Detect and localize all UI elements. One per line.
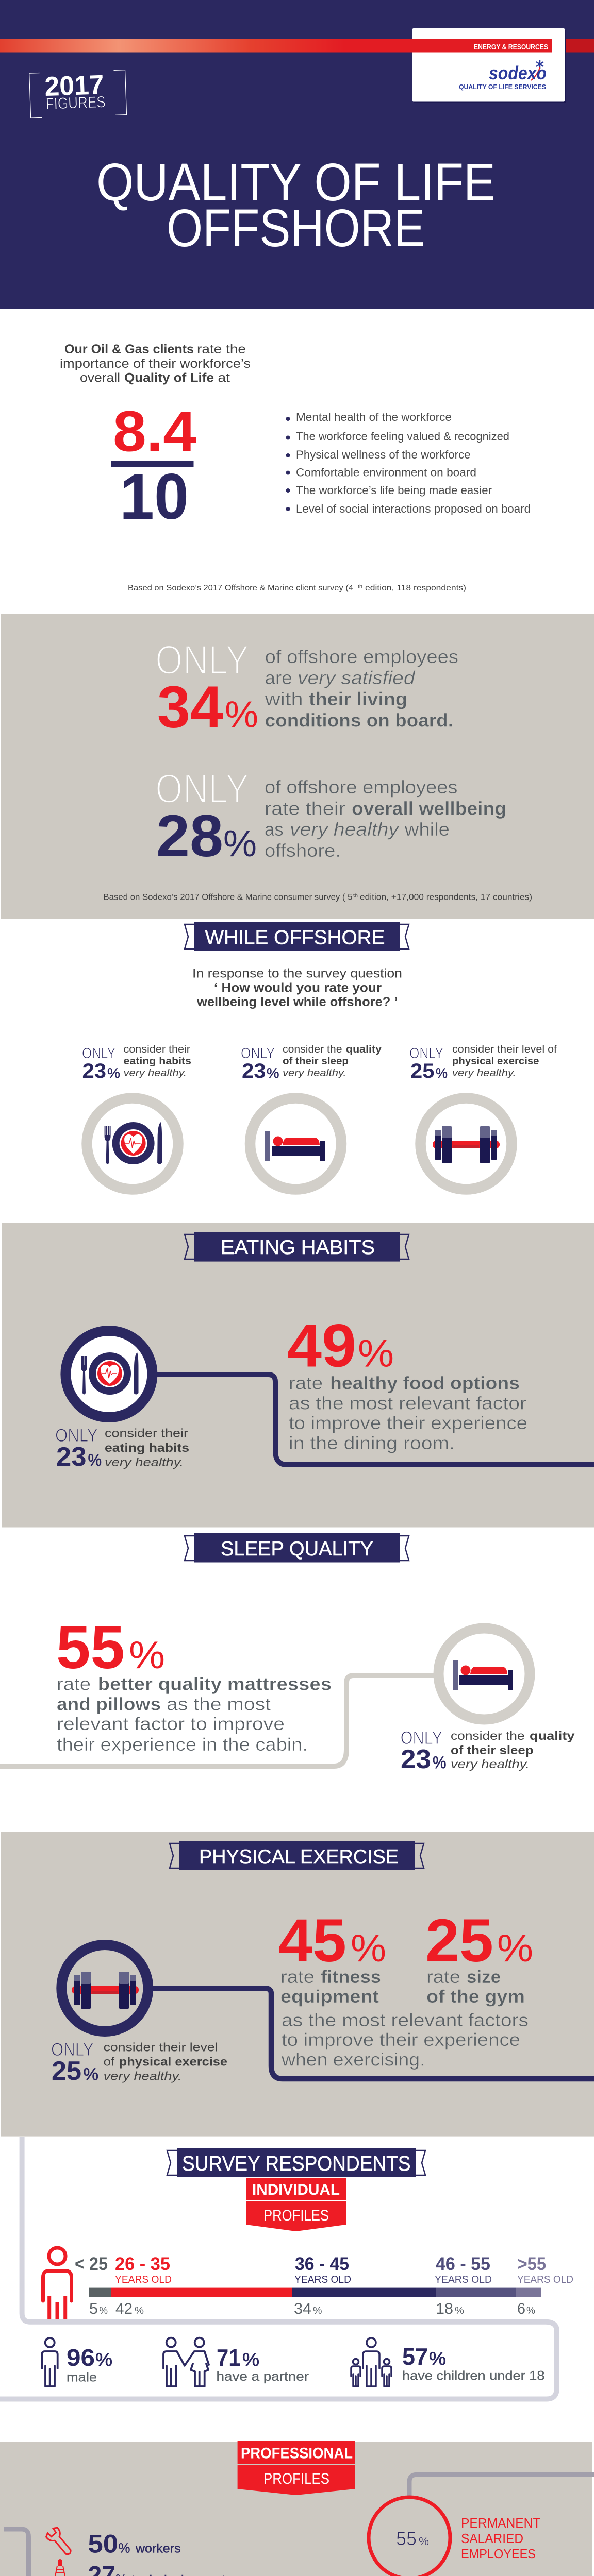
circle: permanent salaried 55 percent: % xyxy=(419,2535,429,2548)
stat: 34 percent satisfied: ONLY xyxy=(155,637,249,683)
icon: plate in navy ring xyxy=(65,1331,152,1417)
stat column: exercise 25 percent: % xyxy=(436,1065,448,1081)
stat: eating habits 23 percent: % xyxy=(88,1451,102,1469)
age percentages: % xyxy=(135,2306,144,2316)
stat: 28 percent healthy: as xyxy=(265,819,284,840)
age group labels: YEARS OLD xyxy=(435,2274,492,2285)
stat: 96 percent male xyxy=(67,2344,112,2384)
stat: 71 percent partner: 71 xyxy=(217,2344,240,2371)
stat: 45 and 25 percent gym: rate xyxy=(426,1967,460,1987)
age percentages: 5 xyxy=(89,2300,98,2317)
tag: professional profiles: PROFILES xyxy=(263,2470,329,2487)
stat: 45 and 25 percent gym xyxy=(278,1907,533,2070)
age percentages: 42 xyxy=(116,2300,133,2317)
stat: 57 percent children: have children under 18 xyxy=(402,2369,544,2383)
stat: 45 and 25 percent gym: % xyxy=(351,1926,386,1970)
stat column: exercise 25 percent: 25 xyxy=(410,1060,434,1082)
footnote: consumer survey xyxy=(103,892,532,902)
stat: 45 and 25 percent gym: size xyxy=(467,1967,501,1987)
bullet list: quality of life factors: Level of social interactions proposed on board xyxy=(296,502,531,515)
title: OFFSHORE xyxy=(167,198,425,258)
tag: individual profiles: INDIVIDUAL xyxy=(252,2181,340,2198)
stat column: sleep 23 percent: ONLY xyxy=(241,1045,275,1062)
stat column: eating habits 23 percent: % xyxy=(107,1065,120,1081)
stat column: exercise 25 percent: physical exercise xyxy=(452,1056,539,1067)
intro text: clients rating: at xyxy=(218,371,230,385)
stat: sleep 23 percent xyxy=(401,1728,575,1774)
stat row: 27 percent technical operators xyxy=(88,2561,243,2576)
footnote: client survey xyxy=(128,584,466,592)
stat column: eating habits 23 percent: eating habits xyxy=(124,1056,191,1067)
stat: 49 percent healthy food: in the dining room. xyxy=(289,1433,455,1453)
stat: 45 and 25 percent gym: equipment xyxy=(280,1987,379,2007)
header red banner xyxy=(0,39,594,53)
stat: eating habits 23 percent xyxy=(55,1426,189,1472)
bullet list: quality of life factors: Mental health of the workforce xyxy=(296,411,452,423)
stat column: sleep 23 percent: very healthy. xyxy=(283,1067,346,1079)
icon: wrench xyxy=(45,2526,75,2558)
icon: red person xyxy=(43,2248,71,2319)
connector line: professional xyxy=(4,2475,594,2576)
stat column: sleep 23 percent: % xyxy=(267,1065,279,1081)
icon: plate in ring xyxy=(87,1098,178,1189)
stat: 55 percent mattresses: 55 xyxy=(56,1614,125,1682)
stat: 34 percent satisfied: with xyxy=(264,688,303,709)
stat: 49 percent healthy food: to improve their experience xyxy=(289,1413,527,1433)
age percentages: 34 xyxy=(294,2300,311,2317)
stat: 55 percent mattresses: rate xyxy=(57,1674,91,1694)
stat column: eating habits 23 percent: 23 xyxy=(82,1060,106,1082)
stat: exercise 25 percent: physical exercise xyxy=(119,2055,227,2068)
stat: 57 percent children: 57 xyxy=(402,2343,428,2370)
connector line: exercise xyxy=(153,1989,594,2079)
survey question text: In response to the survey question xyxy=(192,967,402,981)
age percentages xyxy=(89,2300,535,2317)
ribbon heading: physical exercise: PHYSICAL EXERCISE xyxy=(199,1846,399,1868)
stat: 55 percent mattresses: and pillows xyxy=(57,1694,161,1715)
intro text: clients rating: Our Oil & Gas clients xyxy=(64,342,194,357)
stat: 28 percent healthy: ONLY xyxy=(155,766,249,811)
survey question text: wellbeing level while offshore? ’ xyxy=(196,995,398,1009)
tag: individual profiles xyxy=(246,2178,346,2231)
footnote: client survey: edition, 118 respondents) xyxy=(365,584,466,592)
intro text: clients rating: rate the xyxy=(197,342,246,357)
stat column: sleep 23 percent: of their sleep xyxy=(283,1056,349,1067)
age group labels: 46 - 55 xyxy=(436,2254,490,2274)
stat: eating habits 23 percent: eating habits xyxy=(105,1441,189,1454)
age group labels: YEARS OLD xyxy=(294,2274,351,2285)
stat: exercise 25 percent: 25 xyxy=(52,2056,81,2086)
stat: 49 percent healthy food: 49 xyxy=(287,1312,356,1380)
survey question text: ‘ How would you rate your xyxy=(214,981,382,995)
title: QUALITY OF LIFE xyxy=(96,152,496,212)
stat row: 50 percent workers: 50 xyxy=(88,2530,118,2558)
stat: sleep 23 percent: very healthy. xyxy=(451,1757,530,1771)
age percentages: % xyxy=(526,2306,535,2316)
stat: 34 percent satisfied xyxy=(155,637,458,740)
age group labels: 26 - 35 xyxy=(115,2254,170,2274)
panel: professional profiles xyxy=(0,2442,592,2576)
stat: sleep 23 percent: 23 xyxy=(401,1744,431,1774)
stat column: exercise 25 percent: ONLY xyxy=(409,1045,443,1062)
stat: 45 and 25 percent gym: fitness xyxy=(321,1967,381,1987)
age group labels xyxy=(75,2254,573,2285)
bullet list: quality of life factors: The workforce feeling valued & recognized xyxy=(296,430,509,443)
stat: 34 percent satisfied: 34 xyxy=(157,674,223,740)
stat: 28 percent healthy: rate their xyxy=(265,798,345,819)
stat: 34 percent satisfied: their living xyxy=(309,688,407,709)
stat row: 50 percent workers: workers xyxy=(135,2542,180,2556)
age group labels: YEARS OLD xyxy=(517,2274,573,2285)
stat: 96 percent male: male xyxy=(67,2370,97,2384)
stat: exercise 25 percent: % xyxy=(84,2065,98,2083)
stat: 55 percent mattresses: their experience in the cabin. xyxy=(57,1735,308,1755)
age group labels: < 25 xyxy=(75,2254,108,2274)
panel: satisfaction figures xyxy=(1,614,594,919)
stat: 45 and 25 percent gym: to improve their experience xyxy=(282,2030,520,2050)
stat: exercise 25 percent: very healthy. xyxy=(104,2069,182,2082)
stat column: sleep 23 percent xyxy=(241,1044,382,1082)
intro text: clients rating: importance of their workforce’s xyxy=(60,357,251,371)
stat: 34 percent satisfied: of offshore employees xyxy=(265,646,458,667)
stat: 96 percent male: 96 xyxy=(67,2344,95,2371)
icon: bed in grey ring xyxy=(438,1628,530,1720)
stat: 55 percent mattresses: relevant factor to improve xyxy=(57,1714,285,1734)
stat: 49 percent healthy food: % xyxy=(358,1332,394,1375)
connector line: eating xyxy=(157,1375,594,1465)
ribbon heading: sleep quality xyxy=(185,1533,409,1562)
worker category labels: PERMANENT xyxy=(461,2515,541,2531)
age group labels: >55 xyxy=(518,2254,546,2274)
icon: oil rig xyxy=(50,2560,70,2576)
stat: eating habits 23 percent: consider their xyxy=(105,1427,188,1440)
stat: 34 percent satisfied: conditions on board. xyxy=(265,710,453,731)
stat: 57 percent children xyxy=(402,2343,544,2383)
icon: male person xyxy=(42,2338,58,2386)
stat: sleep 23 percent: ONLY xyxy=(401,1728,442,1748)
footnote: consumer survey: Based on Sodexo’s 2017 Offshore & Marine consumer survey ( 5 xyxy=(103,892,353,902)
tag: professional profiles: PROFESSIONAL xyxy=(241,2445,353,2462)
stat column: exercise 25 percent: consider their level of xyxy=(452,1044,557,1055)
panel: eating habits xyxy=(2,1223,594,1527)
stat: 49 percent healthy food: rate xyxy=(289,1374,323,1394)
stat: exercise 25 percent: ONLY xyxy=(51,2040,94,2060)
stat: sleep 23 percent: consider the xyxy=(451,1729,525,1742)
ribbon heading: sleep quality: SLEEP QUALITY xyxy=(221,1538,373,1560)
energy and resources label: ENERGY & RESOURCES xyxy=(474,43,548,52)
survey question text xyxy=(192,967,402,1009)
icon: family xyxy=(351,2338,391,2386)
stat column: sleep 23 percent: consider the xyxy=(283,1044,342,1055)
stat: eating habits 23 percent: very healthy. xyxy=(105,1455,184,1469)
bullet list: quality of life factors: Physical wellness of the workforce xyxy=(296,448,470,461)
stat: exercise 25 percent xyxy=(51,2040,227,2086)
stat: 28 percent healthy: of offshore employees xyxy=(265,776,458,798)
ribbon heading: physical exercise xyxy=(170,1841,424,1870)
footnote: client survey: th xyxy=(358,584,362,589)
badge: 2017 figures: 2017 xyxy=(44,70,105,102)
stat column: eating habits 23 percent: very healthy. xyxy=(124,1067,187,1079)
logo card: sodexo xyxy=(489,62,547,83)
stat: eating habits 23 percent: 23 xyxy=(56,1442,87,1472)
logo card xyxy=(412,28,566,103)
stat: 45 and 25 percent gym: rate xyxy=(280,1967,315,1987)
stat: 55 percent mattresses: better quality mattresses xyxy=(98,1674,332,1694)
stat: 28 percent healthy: while xyxy=(404,819,450,840)
stat: 45 and 25 percent gym: of the gym xyxy=(426,1987,525,2007)
ribbon heading: while offshore: WHILE OFFSHORE xyxy=(205,926,385,949)
stat: 34 percent satisfied: are xyxy=(265,667,292,688)
stat: sleep 23 percent: % xyxy=(433,1753,447,1772)
stat: 55 percent mattresses: % xyxy=(129,1633,165,1676)
stat: 71 percent partner xyxy=(217,2344,309,2384)
stat: 49 percent healthy food xyxy=(287,1312,527,1453)
icon: bed in ring xyxy=(250,1098,341,1189)
stat: 57 percent children: % xyxy=(429,2349,446,2369)
tag: professional profiles xyxy=(238,2441,355,2495)
score: 8.4 out of 10: 10 xyxy=(120,461,189,533)
stat column: eating habits 23 percent xyxy=(82,1044,191,1082)
stat column: eating habits 23 percent: consider their xyxy=(124,1044,190,1055)
stat column: sleep 23 percent: 23 xyxy=(242,1060,266,1082)
stat column: eating habits 23 percent: ONLY xyxy=(82,1045,116,1062)
connector line: respondents xyxy=(0,2137,557,2399)
worker category labels: EMPLOYEES xyxy=(461,2546,536,2562)
stat column: exercise 25 percent xyxy=(409,1044,557,1082)
stat: 28 percent healthy: offshore. xyxy=(265,840,341,861)
tag: individual profiles: PROFILES xyxy=(263,2207,329,2224)
footnote: consumer survey: th xyxy=(353,893,358,898)
footnote: consumer survey: edition, +17,000 respondents, 17 countries) xyxy=(360,892,532,902)
worker category labels xyxy=(461,2515,556,2576)
stat: 45 and 25 percent gym: 45 xyxy=(278,1907,346,1975)
age percentages: 6 xyxy=(517,2300,525,2317)
stat: 34 percent satisfied: very satisfied xyxy=(298,667,416,688)
ribbon heading: while offshore xyxy=(185,922,409,951)
intro text: clients rating xyxy=(60,342,251,385)
title xyxy=(96,152,496,258)
score: 8.4 out of 10 xyxy=(111,400,196,533)
stat: 55 percent mattresses: as the most xyxy=(167,1694,271,1715)
icon: couple xyxy=(163,2338,209,2386)
stat: 28 percent healthy: 28 xyxy=(156,803,223,869)
bullet list: quality of life factors xyxy=(286,411,531,515)
stat: sleep 23 percent: quality xyxy=(530,1729,575,1742)
stat: eating habits 23 percent: ONLY xyxy=(55,1426,98,1446)
stat: sleep 23 percent: of their sleep xyxy=(451,1743,533,1757)
stat: 45 and 25 percent gym: when exercising. xyxy=(281,2049,425,2070)
worker category labels: SALARIED xyxy=(461,2531,523,2546)
circle: permanent salaried 55 percent xyxy=(369,2497,450,2576)
bullet list: quality of life factors: Comfortable environment on board xyxy=(296,466,476,479)
stat: 96 percent male: % xyxy=(95,2350,112,2370)
stat: 45 and 25 percent gym: 25 xyxy=(425,1907,493,1975)
stat: 49 percent healthy food: healthy food options xyxy=(330,1374,520,1394)
icon: dumbbell in ring xyxy=(421,1098,512,1189)
stat: 55 percent mattresses xyxy=(56,1614,332,1755)
stat: exercise 25 percent: consider their level xyxy=(104,2040,218,2054)
stat: 45 and 25 percent gym: as the most relevant factors xyxy=(282,2010,529,2030)
stat: 28 percent healthy: very healthy xyxy=(290,819,400,840)
age percentages: % xyxy=(313,2306,322,2316)
panel: physical exercise xyxy=(1,1832,594,2137)
stat: 71 percent partner: have a partner xyxy=(217,2369,309,2384)
age percentages: % xyxy=(99,2306,108,2316)
stat: 71 percent partner: % xyxy=(242,2350,259,2370)
stat: 28 percent healthy: overall wellbeing xyxy=(352,798,506,819)
intro text: clients rating: overall xyxy=(80,371,120,385)
badge: 2017 figures xyxy=(29,69,127,118)
stat column: sleep 23 percent: quality xyxy=(346,1044,382,1055)
age percentages: % xyxy=(455,2306,464,2316)
logo card: QUALITY OF LIFE SERVICES xyxy=(459,83,546,91)
intro text: clients rating: Quality of Life xyxy=(124,371,214,385)
ribbon heading: eating habits xyxy=(185,1232,409,1262)
stat column: exercise 25 percent: very healthy. xyxy=(452,1067,516,1079)
ribbon heading: eating habits: EATING HABITS xyxy=(221,1236,375,1259)
stat: 34 percent satisfied: % xyxy=(225,694,258,736)
badge: 2017 figures: FIGURES xyxy=(45,93,106,113)
stat: exercise 25 percent: of xyxy=(104,2055,115,2068)
bar chart: age distribution xyxy=(89,2288,541,2297)
stat: 49 percent healthy food: as the most relevant factor xyxy=(289,1394,526,1414)
circle: permanent salaried 55 percent: 55 xyxy=(396,2528,417,2549)
panel: navy header background xyxy=(0,0,594,309)
score: 8.4 out of 10: 8.4 xyxy=(113,400,196,464)
stat: 28 percent healthy xyxy=(155,766,506,869)
ribbon heading: survey respondents: SURVEY RESPONDENTS xyxy=(182,2151,410,2175)
footnote: client survey: Based on Sodexo’s 2017 Offshore & Marine client survey (4 xyxy=(128,584,353,592)
stat row: 50 percent workers: % xyxy=(119,2540,130,2556)
stat: 28 percent healthy: % xyxy=(223,823,257,865)
icon: dumbbell in navy ring xyxy=(61,1945,148,2031)
age group labels: 36 - 45 xyxy=(295,2254,349,2274)
stat row: 50 percent workers xyxy=(88,2530,180,2558)
connector line: sleep xyxy=(0,1675,436,1766)
age group labels: YEARS OLD xyxy=(115,2274,172,2285)
stat: 45 and 25 percent gym: % xyxy=(497,1926,533,1970)
age percentages: 18 xyxy=(436,2300,453,2317)
bullet list: quality of life factors: The workforce’s life being made easier xyxy=(296,484,492,497)
